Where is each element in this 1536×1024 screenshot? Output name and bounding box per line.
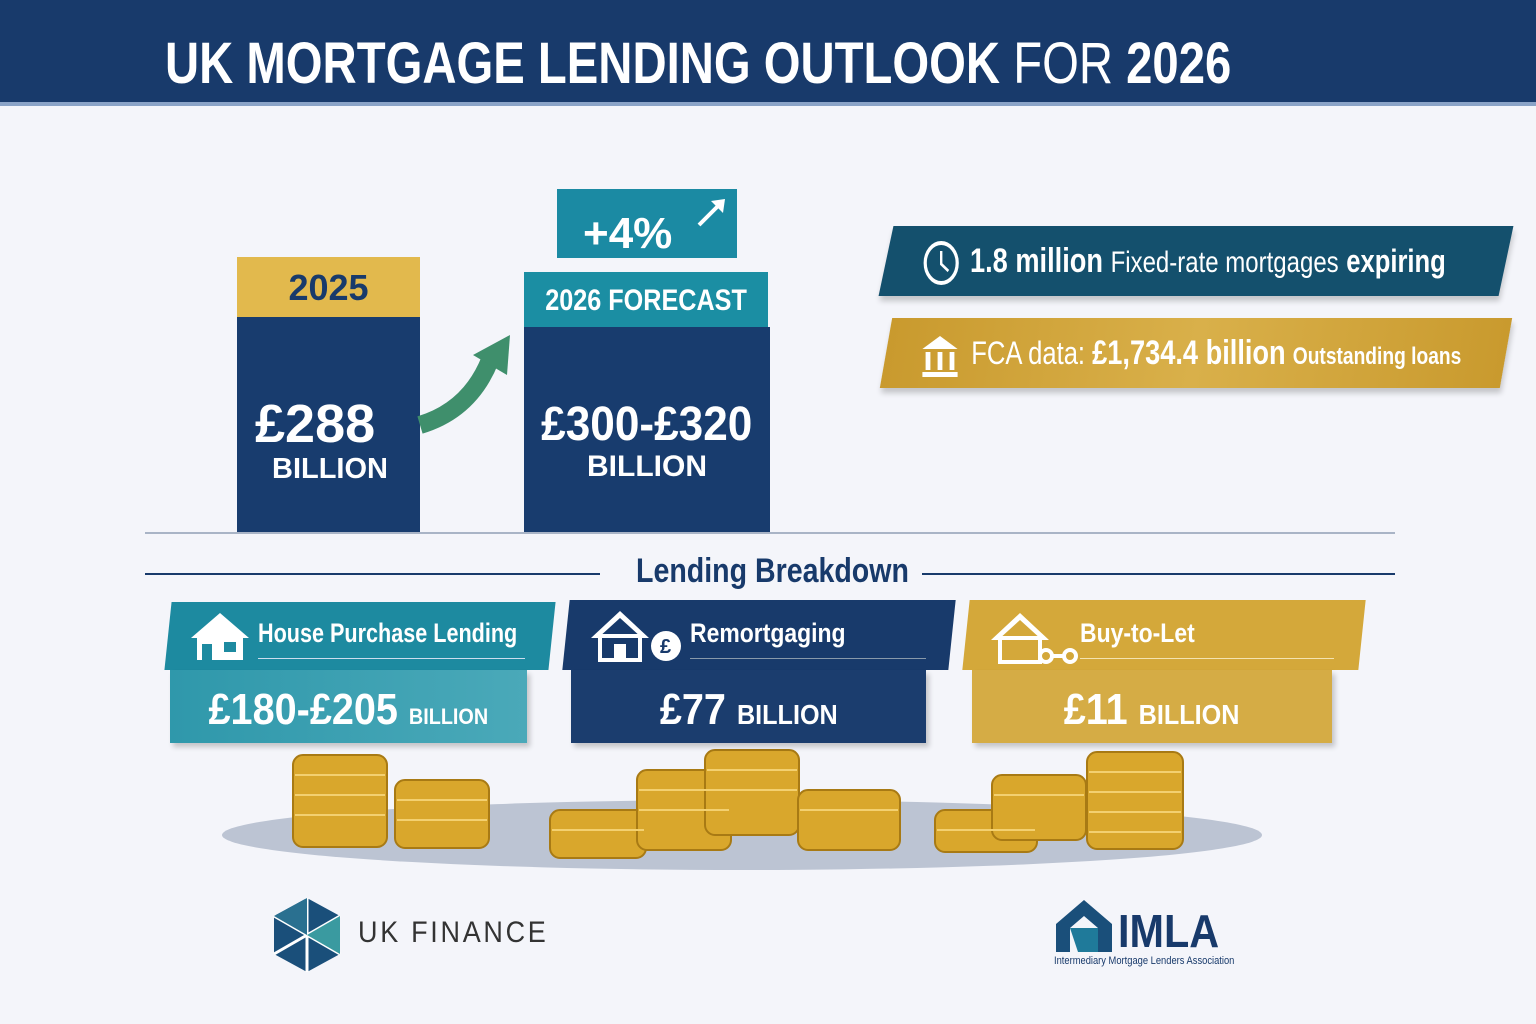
badge: +4%: +4% [583, 209, 672, 258]
icon: house [191, 613, 249, 660]
icon: house with pound: £ [660, 636, 671, 658]
logo: UK Finance: UK FINANCE [358, 916, 549, 949]
header bar [0, 0, 1536, 106]
label 2025 [237, 257, 420, 317]
bar: 2026 forecast [524, 272, 770, 532]
card: buy-to-let [962, 600, 1366, 750]
title: UK MORTGAGE LENDING OUTLOOK FOR 2026 [165, 31, 1231, 96]
coins platform [222, 749, 1262, 870]
logo: IMLA [1054, 900, 1234, 967]
text: 1.8 million Fixed-rate mortgages expiring [970, 242, 1446, 280]
value: buy-to-let [972, 670, 1332, 743]
card: buy-to-let: Buy-to-Let [1080, 618, 1195, 648]
banner: FCA data [880, 318, 1512, 388]
icon: house with pound [591, 611, 681, 662]
logo: UK Finance [274, 898, 549, 972]
value forecast [524, 327, 770, 532]
logo: IMLA: Intermediary Mortgage Lenders Association [1054, 955, 1234, 967]
card: remortgaging [562, 600, 956, 750]
arrow: growth [418, 335, 510, 434]
card: house purchase [164, 602, 556, 750]
value 2025: £288 [255, 394, 375, 454]
icon: house with key [991, 613, 1078, 664]
logo: IMLA: IMLA [1118, 905, 1219, 957]
value 2025: BILLION [272, 453, 388, 485]
value 2025 [237, 317, 420, 532]
value: buy-to-let: £11 BILLION [1064, 685, 1240, 734]
icon: bank [922, 336, 958, 377]
label 2025: 2025 [288, 267, 369, 308]
value forecast: £300-£320 [541, 398, 753, 451]
value: house purchase [170, 670, 527, 743]
card: house purchase: House Purchase Lending [258, 618, 517, 648]
banner: fixed-rate [879, 226, 1513, 296]
text: FCA data: £1,734.4 billion Outstanding loans [971, 334, 1461, 372]
icon: clock [924, 241, 959, 285]
card: remortgaging: Remortgaging [690, 618, 846, 648]
value: remortgaging [571, 670, 926, 743]
value: house purchase: £180-£205 BILLION [209, 685, 488, 734]
label forecast [524, 272, 768, 327]
value: remortgaging: £77 BILLION [660, 685, 837, 734]
bar: 2025 [237, 257, 420, 532]
label forecast: 2026 FORECAST [545, 284, 747, 317]
value forecast: BILLION [587, 450, 707, 483]
badge: +4% [557, 189, 737, 258]
heading: Lending Breakdown: Lending Breakdown [636, 552, 909, 590]
